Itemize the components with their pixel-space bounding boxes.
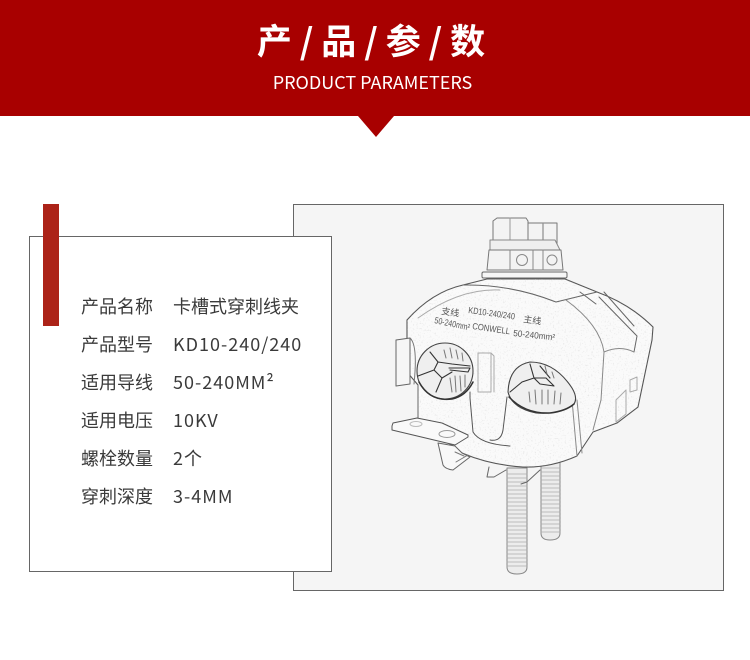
mounting bracket	[392, 418, 540, 484]
illustration: piercing clamp sketch	[392, 218, 654, 574]
row: product name: 产品名称	[81, 293, 153, 319]
row: applicable voltage: 10KV	[173, 407, 219, 433]
engraved text: 50-240mm²	[513, 328, 556, 342]
engraved text: CONWELL	[472, 321, 511, 336]
subtitle: PRODUCT PARAMETERS	[273, 69, 472, 95]
title: 产 / 品 / 参 / 数	[257, 14, 485, 65]
hex nuts	[482, 218, 567, 278]
bolts	[507, 462, 560, 574]
left wire hole	[417, 343, 473, 399]
row: applicable wire	[81, 369, 275, 395]
accent bar	[43, 204, 59, 326]
engraved text	[434, 304, 556, 342]
row: applicable wire: 50-240MM²	[173, 369, 275, 395]
row: product name: 卡槽式穿刺线夹	[173, 293, 299, 319]
row: piercing depth: 3-4MM	[173, 483, 233, 509]
row: product model	[81, 331, 302, 357]
row: applicable wire: 适用导线	[81, 369, 153, 395]
panel: parameters	[29, 236, 332, 572]
row: bolt quantity: 螺栓数量	[81, 445, 153, 471]
panel: product image background	[293, 204, 724, 591]
clamp body	[396, 279, 653, 467]
row: piercing depth	[81, 483, 233, 509]
row: applicable voltage: 适用电压	[81, 407, 153, 433]
header band	[0, 0, 750, 116]
row: bolt quantity: 2个	[173, 445, 203, 471]
row: bolt quantity	[81, 445, 203, 471]
row: product name	[81, 293, 299, 319]
row: product model: 产品型号	[81, 331, 153, 357]
engraved text: KD10-240/240	[468, 305, 516, 322]
engraved text: 50-240mm²	[434, 315, 471, 332]
right wire hole	[508, 362, 576, 413]
row: applicable voltage	[81, 407, 219, 433]
engraved text: 主线	[523, 312, 542, 327]
arrow: header pointer	[358, 116, 394, 137]
engraved text: 支线	[441, 304, 460, 319]
row: product model: KD10-240/240	[173, 331, 302, 357]
row: piercing depth: 穿刺深度	[81, 483, 153, 509]
